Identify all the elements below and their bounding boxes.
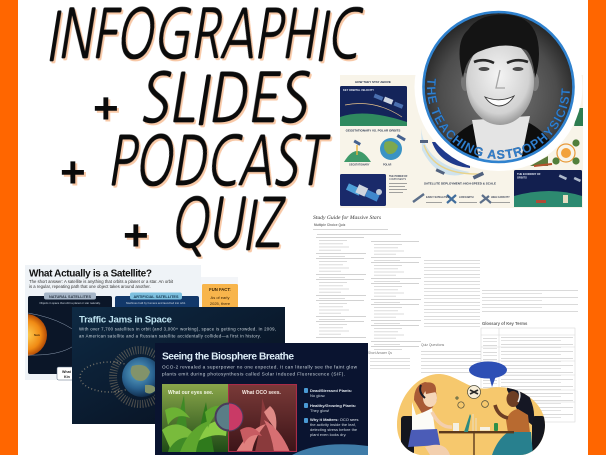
title: PODCAST: [105, 126, 332, 195]
card: satellite close up: [340, 174, 386, 206]
text: satellite notes: COMPONENTS: [389, 178, 407, 181]
callout: fun fact: [202, 284, 238, 308]
icons: deployment stages: EARLY SATELLITES: [426, 196, 449, 199]
subheading: multiple choice: Multiple Choice Quiz: [314, 223, 346, 227]
heading: satellite deployment: SATELLITE DEPLOYMENT: HIGH-SPEED & SCALE: [424, 182, 496, 186]
panel: natural satellites: [28, 292, 112, 374]
infographic poster: [340, 75, 583, 208]
slide 2 text: With over 7,700 satellites in orbit (and 3,000+ working), space is getting crowded. In 2009,: [79, 326, 276, 332]
list: plant states: [304, 388, 358, 437]
glossary heading: Glossary of Key Terms: [482, 321, 528, 326]
icon: big earth: [380, 134, 406, 160]
blue ring: [424, 12, 574, 162]
callout: fun fact: As of early: [211, 295, 229, 300]
title: +: [60, 148, 86, 197]
callout: what kind: [57, 367, 79, 380]
slide 3 text: [162, 364, 358, 376]
list: plant states: plant even looks dry.: [310, 432, 346, 437]
callout: fun fact: FUN FACT:: [209, 287, 231, 292]
title: +: [93, 84, 119, 133]
quiz subheading: Quiz Questions: [421, 343, 444, 347]
list: plant states: They glow!: [310, 408, 329, 413]
icons: deployment stages: [413, 194, 510, 203]
panel: what oco sees: [228, 384, 297, 452]
panel: artificial satellites: ARTIFICIAL SATELLITES: [134, 295, 179, 299]
slide 1 intro: is a regular, repeating path that one object takes around another.: [29, 284, 151, 289]
list: plant states: Why it Matters: OCO sees: [310, 417, 358, 422]
badge text: THE TEACHING ASTROPHYSICIST: [426, 78, 570, 159]
panel: what our eyes see: What our eyes see.: [168, 390, 214, 396]
slide 3 title: Seeing the Biosphere Breathe: [162, 352, 294, 362]
question text columns: [313, 229, 580, 375]
title: SLIDES: [137, 63, 316, 132]
speech bubble: [469, 362, 507, 387]
slide 2 text: an American satellite and a Russian satellite accidentally collided—a first in history.: [79, 334, 261, 338]
speaker right: [492, 382, 545, 455]
labels: orbit types: GEOSTATIONARY: [349, 164, 370, 166]
illustration: launch swoop: [420, 128, 484, 179]
slide 2 text: [79, 326, 276, 338]
icon: small earth dome: [344, 140, 371, 162]
card: orbit with satellite: KEY ORBITAL VELOCITY: [343, 88, 374, 92]
title: QUIZ: [168, 188, 289, 257]
podcast illustration: [397, 362, 545, 455]
panel: artificial satellites: Machines built by humans and launched into orbit.: [126, 301, 186, 305]
title: +: [123, 211, 149, 260]
panel: what oco sees: What OCO sees.: [242, 390, 282, 396]
panel: natural satellites: NATURAL SATELLITES: [49, 295, 91, 299]
list: plant states: the activity inside the leaf,: [310, 422, 356, 427]
panel: natural satellites: Objects in space that orbit a planet or star naturally.: [39, 301, 101, 305]
list: plant states: Dead/Stressed Plants:: [310, 388, 352, 393]
card: the economy of orbits: ORBITS: [517, 176, 527, 180]
portrait: [422, 11, 574, 165]
title: INFOGRAPHIC: [44, 0, 367, 68]
icons: deployment stages: HIGH CAPACITY: [491, 196, 510, 199]
text: satellite notes: THE POWER OF: [389, 175, 408, 178]
magnifier: [216, 404, 242, 430]
heading: how they stay above: HOW THEY STAY ABOVE: [355, 80, 391, 84]
card: the economy of orbits: THE ECONOMY OF: [517, 172, 541, 176]
slide 1: what is a satellite: [5, 265, 238, 380]
slide 1 intro: The short answer: A satellite is anything that orbits a planet or a star. An orbit: [29, 279, 174, 284]
panel: what our eyes see: [162, 384, 228, 452]
slide 3 text: plants emit during photosynthesis called Solar Induced Fluorescence (SIF).: [162, 372, 345, 376]
labels: orbit types: POLAR: [383, 164, 392, 166]
list: plant states: Healthy/Growing Plants:: [310, 403, 356, 408]
labels: orbit types: [349, 164, 392, 166]
glossary table: [481, 328, 575, 422]
callout: fun fact: 2025, there: [210, 301, 231, 306]
profile badge: [414, 10, 582, 171]
earth limb: [292, 444, 368, 455]
study guide title: Study Guide for Massive Stars: [313, 214, 381, 221]
heading: geostationary vs polar: GEOSTATIONARY VS. POLAR ORBITS: [346, 128, 400, 132]
floating sound icons: [456, 386, 488, 408]
slide 3 text: OCO-2 revealed a superpower no one expected. It can literally see the faint glow: [162, 364, 358, 370]
icon: coin cycle: [530, 108, 583, 166]
text: satellite notes: [389, 175, 408, 193]
callout: what kind: Kin: [64, 375, 70, 379]
white ring: [414, 3, 582, 171]
earth with debris: [80, 350, 167, 404]
panel: artificial satellites: [115, 292, 199, 309]
slide 2: traffic jams in space: [72, 307, 285, 424]
icons: deployment stages: LOW EARTH: [459, 196, 474, 199]
title: [44, 0, 367, 260]
slide 2 title: Traffic Jams in Space: [79, 314, 172, 326]
slide 3: biosphere: [155, 343, 368, 455]
yellow blob: [397, 374, 545, 455]
slide 1 intro: [29, 279, 174, 289]
study guide document: [313, 214, 580, 422]
list: plant states: No glow.: [310, 393, 325, 398]
card: the economy of orbits: [514, 170, 582, 207]
slide 1 title: What Actually is a Satellite?: [29, 268, 152, 280]
panel: natural satellites: Sun: [34, 333, 40, 337]
card: orbit with satellite: [340, 86, 407, 126]
right orange bar: [588, 0, 606, 455]
list: plant states: detecting stress before the: [310, 427, 358, 432]
left orange bar: [0, 0, 18, 455]
speaker left: [401, 382, 452, 455]
short answer subheading: Short Answer Qs: [368, 351, 392, 355]
table and devices: [439, 414, 514, 455]
callout: what kind: What: [62, 370, 72, 374]
